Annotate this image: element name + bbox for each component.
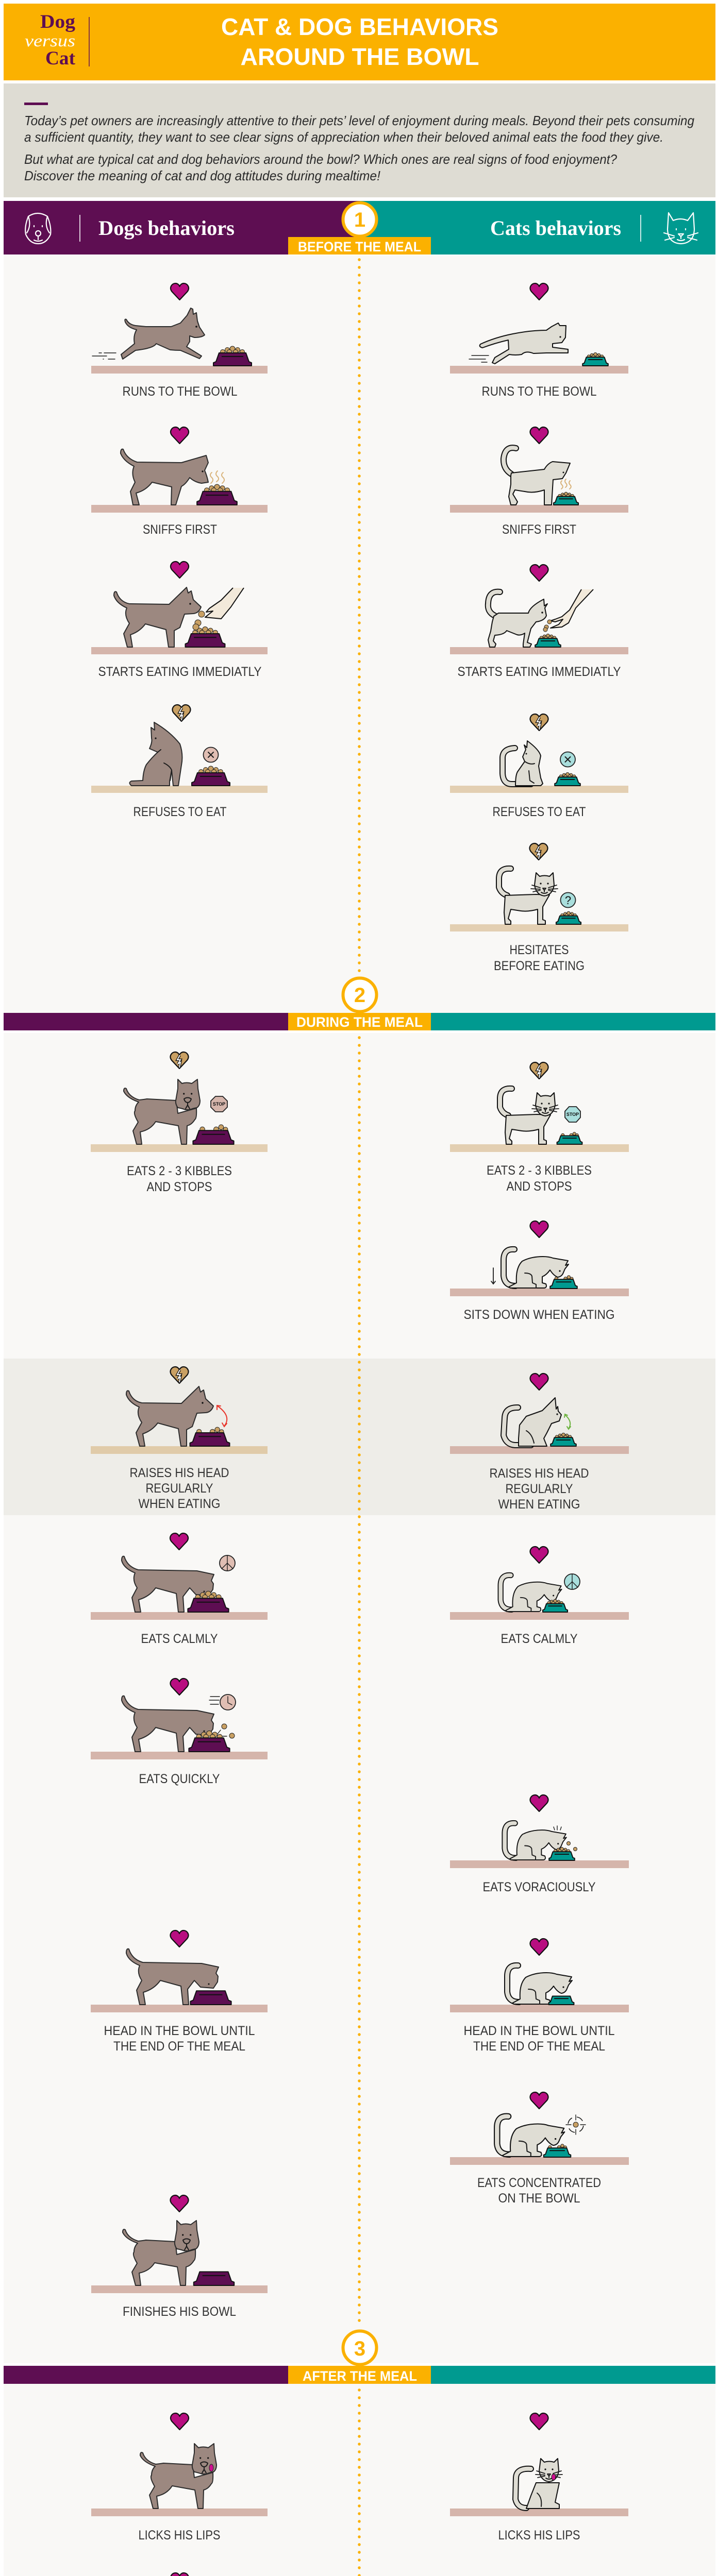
heading: cats behaviors: Cats behaviors: [490, 216, 621, 240]
teal bowl: [549, 1848, 575, 1860]
label: EATS 2 - 3 KIBBLES: [487, 1163, 592, 1178]
label: [127, 1164, 232, 1194]
dog facing front: [123, 2221, 199, 2285]
cat sitting and eating: [504, 1249, 569, 1288]
step 2 badge: 2: [354, 984, 365, 1007]
icon: refuse badge: [203, 747, 219, 762]
arrow: head movement: [217, 1405, 227, 1427]
behavior: dog refuses to eat: [91, 705, 268, 819]
behavior: cat starts eating immediately: [450, 565, 628, 679]
cat eating from hand: [488, 592, 547, 647]
icon: heart: [530, 1221, 548, 1238]
dog running: [92, 308, 205, 359]
speed marks and kibbles: [554, 1826, 577, 1851]
cat licking: [515, 2459, 562, 2509]
label: AND STOPS: [146, 1180, 212, 1194]
label: RAISES HIS HEAD: [130, 1466, 229, 1480]
icon: dog face: [25, 213, 51, 244]
behavior: dog finishes his bowl: [91, 2195, 268, 2319]
cat sitting: [503, 741, 543, 786]
behavior: cat licks his lips: [450, 2413, 628, 2543]
label: EATS CALMLY: [501, 1632, 578, 1646]
step 2 badge: [343, 978, 376, 1012]
label: [464, 2024, 615, 2054]
label: HEAD IN THE BOWL UNTIL: [104, 2024, 255, 2038]
label: RUNS TO THE BOWL: [123, 384, 238, 399]
intro text: [24, 113, 694, 183]
cat eating: [501, 1575, 562, 1612]
icon: stop sign: [565, 1107, 580, 1122]
icon: heart: [171, 1679, 188, 1695]
icon: heart: [530, 2092, 548, 2109]
icon: heart: [171, 1930, 188, 1947]
icon: heart: [171, 2413, 189, 2430]
empty purple bowl: [194, 2272, 234, 2285]
flying kibbles: [216, 1724, 235, 1738]
behavior: dog raises his head regularly: [91, 1367, 268, 1511]
label: EATS VORACIOUSLY: [482, 1880, 596, 1894]
intro text: a sufficient quantity, they want to see clear signs of appreciation when their beloved animal eats the food they give.: [24, 129, 663, 145]
purple bowl: [197, 484, 237, 505]
icon: heart: [530, 1374, 548, 1390]
cat head up: [504, 1398, 561, 1446]
label: [494, 943, 585, 973]
step 1 badge: 1: [354, 209, 365, 231]
purple bowl: [190, 1991, 231, 2005]
teal bowl: [549, 1996, 574, 2005]
purple bowl: [193, 1125, 234, 1144]
icon: heart: [171, 562, 189, 578]
heading: dogs behaviors: Dogs behaviors: [98, 216, 235, 240]
icon: heart: [171, 283, 189, 300]
icon: heart: [530, 565, 548, 581]
behavior: cat refuses to eat: [450, 714, 628, 819]
behavior: dog sniffs first: [91, 427, 268, 537]
label: SITS DOWN WHEN EATING: [464, 1308, 614, 1322]
dog eating: [122, 1556, 214, 1612]
behavior: cat sits down when eating: [450, 1221, 629, 1322]
icon: question badge: ?: [565, 894, 571, 907]
smell waves: [561, 479, 571, 489]
intro text: But what are typical cat and dog behaviors around the bowl? Which ones are real signs of food enjoyment?: [24, 151, 617, 167]
icon: peace sign: [220, 1555, 235, 1571]
label: WHEN EATING: [138, 1497, 221, 1511]
dog sniffing: [121, 449, 208, 505]
label: SNIFFS FIRST: [502, 522, 576, 537]
label: [477, 2176, 601, 2206]
behavior: dog runs to the bowl: [91, 283, 268, 399]
icon: broken heart: [171, 1052, 188, 1069]
behavior: cat hesitates before eating: [450, 843, 628, 973]
label: LICKS HIS LIPS: [498, 2528, 580, 2543]
icon: heart: [530, 1939, 548, 1955]
label: WHEN EATING: [498, 1497, 580, 1512]
behavior: cat raises his head regularly: [450, 1374, 629, 1512]
step 2 label: DURING THE MEAL: [296, 1014, 423, 1030]
hand with kibbles: [543, 589, 593, 632]
behavior: cat sniffs first: [450, 427, 628, 537]
step 3 label: AFTER THE MEAL: [303, 2368, 417, 2384]
dog head up: [126, 1386, 213, 1446]
hand with kibbles: [193, 588, 244, 630]
teal bowl: [557, 1132, 582, 1144]
dog eating: [126, 1949, 219, 2005]
dog licking: [140, 2444, 216, 2509]
teal bowl: [556, 911, 581, 924]
label: THE END OF THE MEAL: [113, 2039, 245, 2054]
teal bowl: [544, 2144, 571, 2157]
label: BEFORE EATING: [494, 959, 585, 973]
teal bowl: [535, 634, 561, 647]
arrow: head movement: [564, 1414, 571, 1429]
cat eating: [505, 1823, 566, 1860]
panel: introduction: [4, 83, 715, 197]
icon: focus target: [566, 2115, 586, 2134]
label: AND STOPS: [506, 1179, 572, 1194]
label: [104, 2024, 255, 2054]
icon: heart: [171, 427, 189, 444]
icon: heart: [530, 1547, 548, 1563]
section header: after the meal: [4, 2331, 715, 2384]
label: LICKS HIS LIPS: [138, 2528, 221, 2543]
logo: Dog versus Cat: [25, 11, 89, 69]
icon: broken heart: [530, 843, 547, 860]
icon: heart: [171, 2195, 188, 2212]
label: [487, 1163, 592, 1194]
label: REFUSES TO EAT: [493, 805, 586, 819]
icon: question badge: [561, 892, 575, 908]
highlighted band: raises his head: [4, 1359, 715, 1515]
cat sniffing: [504, 448, 570, 505]
icon: stop sign: [211, 1096, 227, 1112]
behavior: cat eats calmly: [450, 1547, 629, 1646]
label: HEAD IN THE BOWL UNTIL: [464, 2024, 615, 2038]
behavior: dog doesn't fidget anymore: [91, 2573, 268, 2576]
heading: CAT & DOG BEHAVIORS: [221, 13, 498, 40]
logo: Dog versus Cat: Dog: [40, 11, 76, 32]
step 1 label: BEFORE THE MEAL: [298, 239, 421, 255]
icon: peace sign: [564, 1574, 580, 1589]
behavior: dog eats quickly: [91, 1679, 268, 1786]
behavior: cat eats 2-3 kibbles and stops: [450, 1062, 629, 1194]
dog facing front: [124, 1079, 200, 1144]
step 1 badge: [343, 203, 376, 236]
behavior: cat eats voraciously: [450, 1795, 629, 1894]
label: FINISHES HIS BOWL: [123, 2304, 236, 2319]
dog eating: [122, 1696, 214, 1752]
purple bowl: [188, 1591, 229, 1612]
icon: clock with speed lines: [209, 1694, 236, 1710]
dog eating from hand: [114, 587, 201, 647]
behavior: dog licks his lips: [91, 2413, 268, 2543]
panel: body background during meal: [4, 1033, 715, 2363]
teal bowl: [582, 353, 608, 366]
teal bowl: [543, 1599, 568, 1612]
heading: AROUND THE BOWL: [240, 43, 479, 70]
intro text: Discover the meaning of cat and dog attitudes during mealtime!: [24, 168, 380, 183]
icon: broken heart: [171, 1367, 188, 1383]
purple bowl: [186, 626, 225, 647]
label: SNIFFS FIRST: [143, 522, 217, 537]
teal bowl: [555, 773, 580, 786]
icon: heart: [170, 1533, 188, 1550]
label: STARTS EATING IMMEDIATLY: [458, 665, 621, 679]
purple bowl: [190, 1427, 229, 1446]
label: RUNS TO THE BOWL: [481, 384, 597, 399]
icon: heart: [530, 427, 548, 444]
behavior: dog head in the bowl: [91, 1930, 268, 2054]
logo: Dog versus Cat: Cat: [45, 48, 76, 69]
heading: [221, 13, 498, 70]
behavior: cat eats concentrated on the bowl: [450, 2092, 629, 2206]
label: EATS CALMLY: [141, 1632, 218, 1646]
label: THE END OF THE MEAL: [473, 2039, 605, 2054]
label: REFUSES TO EAT: [133, 805, 227, 819]
label: [130, 1466, 229, 1511]
panel: body background after meal: [4, 2384, 715, 2576]
section header: during the meal: [4, 978, 715, 1030]
behavior: dog starts eating immediately: [91, 562, 268, 679]
purple bowl: [192, 766, 230, 786]
behavior: dog eats 2-3 kibbles and stops: [91, 1052, 268, 1194]
section header: before the meal: [4, 201, 715, 255]
behavior: dog eats calmly: [91, 1533, 268, 1646]
behavior: cat runs to the bowl: [450, 283, 628, 399]
purple bowl: [189, 1731, 230, 1752]
logo: Dog versus Cat: versus: [25, 32, 75, 50]
teal bowl: [550, 1276, 577, 1289]
label: EATS CONCENTRATED: [477, 2176, 601, 2190]
icon: broken heart: [530, 714, 548, 731]
label: REGULARLY: [505, 1482, 573, 1496]
icon: heart: [530, 2413, 548, 2430]
smell waves: [210, 471, 224, 483]
cat standing: [499, 869, 558, 924]
label: REGULARLY: [145, 1481, 213, 1496]
teal bowl: [554, 492, 578, 505]
icon: heart: [530, 1795, 548, 1811]
dog sitting: [130, 722, 182, 786]
panel: body background: [4, 256, 715, 1013]
arrow: down: [491, 1268, 495, 1284]
purple bowl: [213, 346, 252, 366]
title banner: [4, 4, 715, 80]
cat standing: [500, 1089, 559, 1144]
label: EATS QUICKLY: [139, 1772, 220, 1786]
step 3 badge: [343, 2331, 376, 2365]
step 3 badge: 3: [354, 2337, 365, 2360]
teal bowl: [551, 1433, 576, 1446]
icon: stop sign: STOP: [566, 1112, 579, 1117]
label: EATS 2 - 3 KIBBLES: [127, 1164, 232, 1178]
icon: broken heart: [173, 705, 190, 721]
icon: broken heart: [530, 1062, 548, 1079]
icon: heart: [171, 2573, 189, 2576]
icon: heart: [530, 283, 548, 300]
icon: stop sign: STOP: [213, 1101, 225, 1107]
label: HESITATES: [509, 943, 569, 957]
behavior: cat head in the bowl: [450, 1939, 629, 2054]
icon: cat face: [664, 213, 698, 244]
cat running: [469, 323, 568, 364]
label: [490, 1466, 589, 1512]
icon: refuse badge: [560, 752, 575, 767]
cat eating: [507, 1965, 572, 2004]
dotted centre timeline: [358, 260, 361, 2576]
label: STARTS EATING IMMEDIATLY: [98, 665, 262, 679]
label: RAISES HIS HEAD: [490, 1466, 589, 1481]
cat eating: [497, 2116, 564, 2157]
label: ON THE BOWL: [498, 2191, 580, 2206]
